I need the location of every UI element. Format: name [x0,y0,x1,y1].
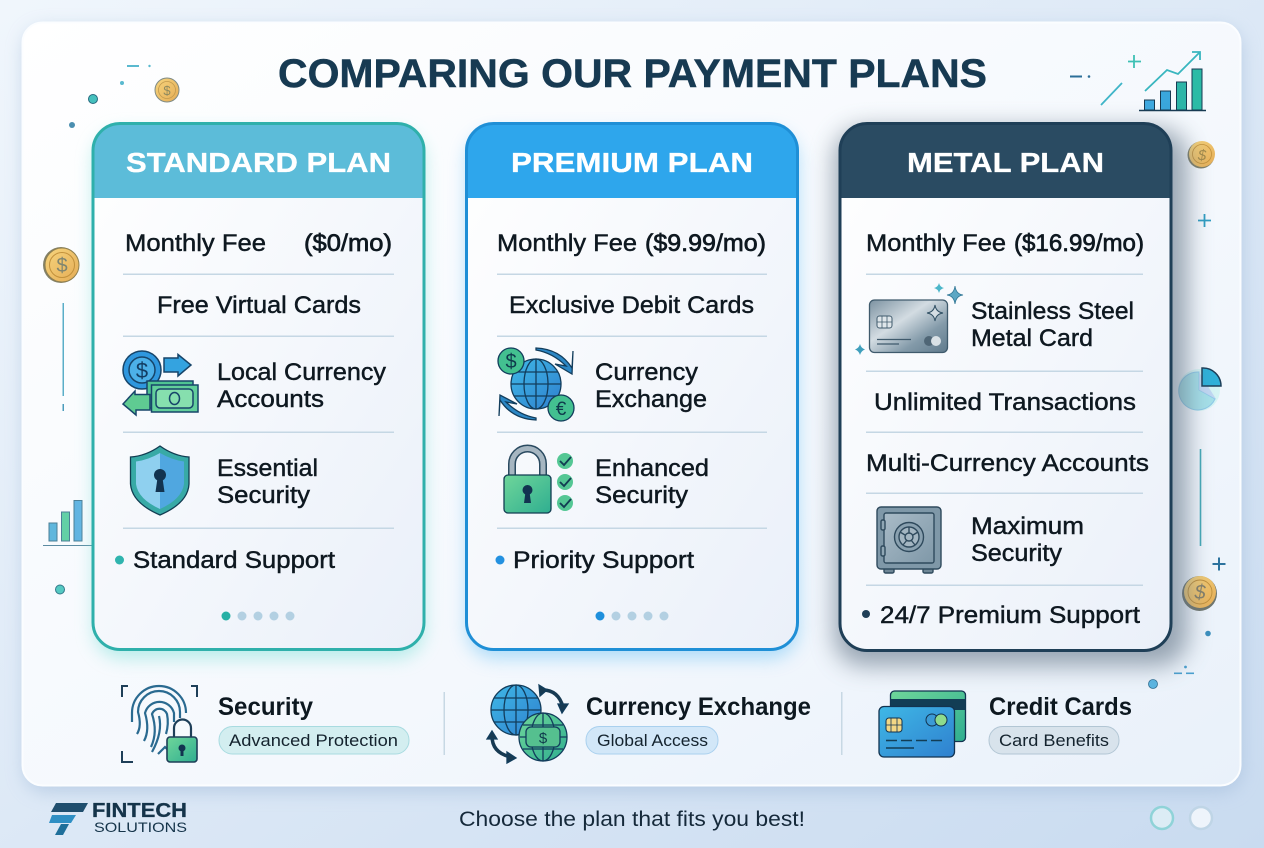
icon: metal card [855,283,963,355]
icon: safe [877,507,941,573]
decoration: right coin lower [1182,576,1217,611]
decoration: left vertical line [62,303,64,411]
row: standard support: Standard Support [133,547,335,574]
panel: standard plan [93,124,424,658]
pill: global access [586,726,718,754]
icon: currency exchange: $ [505,351,517,373]
decoration: right plus [1198,214,1211,227]
decoration: right coin lower: $ [1193,582,1206,604]
label: currency exchange: Currency Exchange [586,693,811,721]
text: stainless steel metal card: Metal Card [971,325,1093,352]
text: essential security: Essential [217,455,318,482]
decoration: left coin: $ [56,255,68,277]
footer circles [1151,807,1212,829]
text: enhanced security: Security [595,482,689,509]
text: stainless steel metal card: Stainless Steel [971,298,1134,325]
decoration: top-left dots and coin: $ [163,83,171,98]
row: monthly fee: Monthly Fee [497,230,637,257]
text: brand subtitle: SOLUTIONS [94,819,187,835]
icon: currency exchange: € [556,399,567,420]
decoration: right coin top [1188,141,1215,168]
icon: two globes with arrows [487,685,568,763]
row: monthly fee: ($0/mo) [304,230,392,257]
text: maximum security: Maximum [971,513,1084,540]
pill: card benefits [989,726,1119,754]
row: premium support: 24/7 Premium Support [880,602,1140,629]
label: credit cards: Credit Cards [989,693,1132,721]
decoration: left bar chart [43,500,92,546]
title: COMPARING OUR PAYMENT PLANS [278,52,987,96]
row: monthly fee [125,230,392,257]
heading: metal plan: METAL PLAN [907,147,1104,178]
pill: advanced protection [219,726,409,754]
text: enhanced security: Enhanced [595,455,709,482]
icon: logo mark [49,803,88,835]
heading: standard plan: STANDARD PLAN [126,147,391,178]
row: monthly fee [497,230,766,257]
icon: padlock with checks [504,448,573,513]
decoration: lower-right marks [1148,631,1211,688]
row: priority support: Priority Support [513,547,694,574]
text: maximum security [971,513,1084,567]
row: monthly fee [866,230,1144,257]
text: brand name: FINTECH [92,800,187,822]
pill: card benefits: Card Benefits [999,731,1109,750]
panel: metal plan [834,124,1188,666]
row: monthly fee: Monthly Fee [866,230,1006,257]
icon: credit cards [879,691,966,757]
pill: global access: Global Access [597,731,708,750]
decoration: right plus lower [1212,558,1226,570]
decoration: left circle [56,585,64,594]
decoration: right vertical line [1200,449,1201,546]
row: monthly fee: ($16.99/mo) [1014,230,1144,257]
row: exclusive debit cards: Exclusive Debit Cards [509,292,754,319]
decoration: pie chart [1178,368,1221,411]
row: free virtual cards: Free Virtual Cards [157,292,361,319]
icon: fingerprint with lock [122,686,197,762]
text: currency exchange: Exchange [595,386,707,413]
text: currency exchange [595,359,707,413]
heading: premium plan: PREMIUM PLAN [511,147,753,178]
pagination dots [596,612,668,620]
text: local currency accounts [217,359,387,413]
panel: premium plan [466,124,798,658]
text: stainless steel metal card [971,298,1134,352]
feature: credit cards [879,691,1132,757]
decoration: top-left dots and coin [69,65,179,128]
text: currency exchange: Currency [595,359,699,386]
icon: shield [130,446,189,515]
pagination dots [222,612,294,620]
text: essential security [217,455,318,509]
row: monthly fee: ($9.99/mo) [645,230,766,257]
footer logo [49,800,187,835]
icon: currency exchange [498,348,574,421]
row: unlimited transactions: Unlimited Transactions [874,389,1136,416]
label: security: Security [218,693,313,721]
icon: local currency exchange: $ [136,358,148,383]
text: local currency accounts: Accounts [217,386,324,413]
decoration: right coin top: $ [1197,147,1207,164]
row: monthly fee: Monthly Fee [125,230,266,257]
text: essential security: Security [217,482,311,509]
decoration: top-right chart [1070,52,1206,110]
decoration: left coin [43,247,79,283]
row: multi-currency accounts: Multi-Currency Accounts [866,450,1149,477]
footer tagline: Choose the plan that fits you best! [459,808,805,831]
pill: advanced protection: Advanced Protection [229,731,398,750]
text: enhanced security [595,455,709,509]
icon: two globes with arrows: $ [539,730,548,747]
text: maximum security: Security [971,540,1063,567]
feature: currency exchange [487,685,811,763]
feature: security [122,686,409,762]
icon: local currency exchange [123,351,198,415]
text: local currency accounts: Local Currency [217,359,387,386]
